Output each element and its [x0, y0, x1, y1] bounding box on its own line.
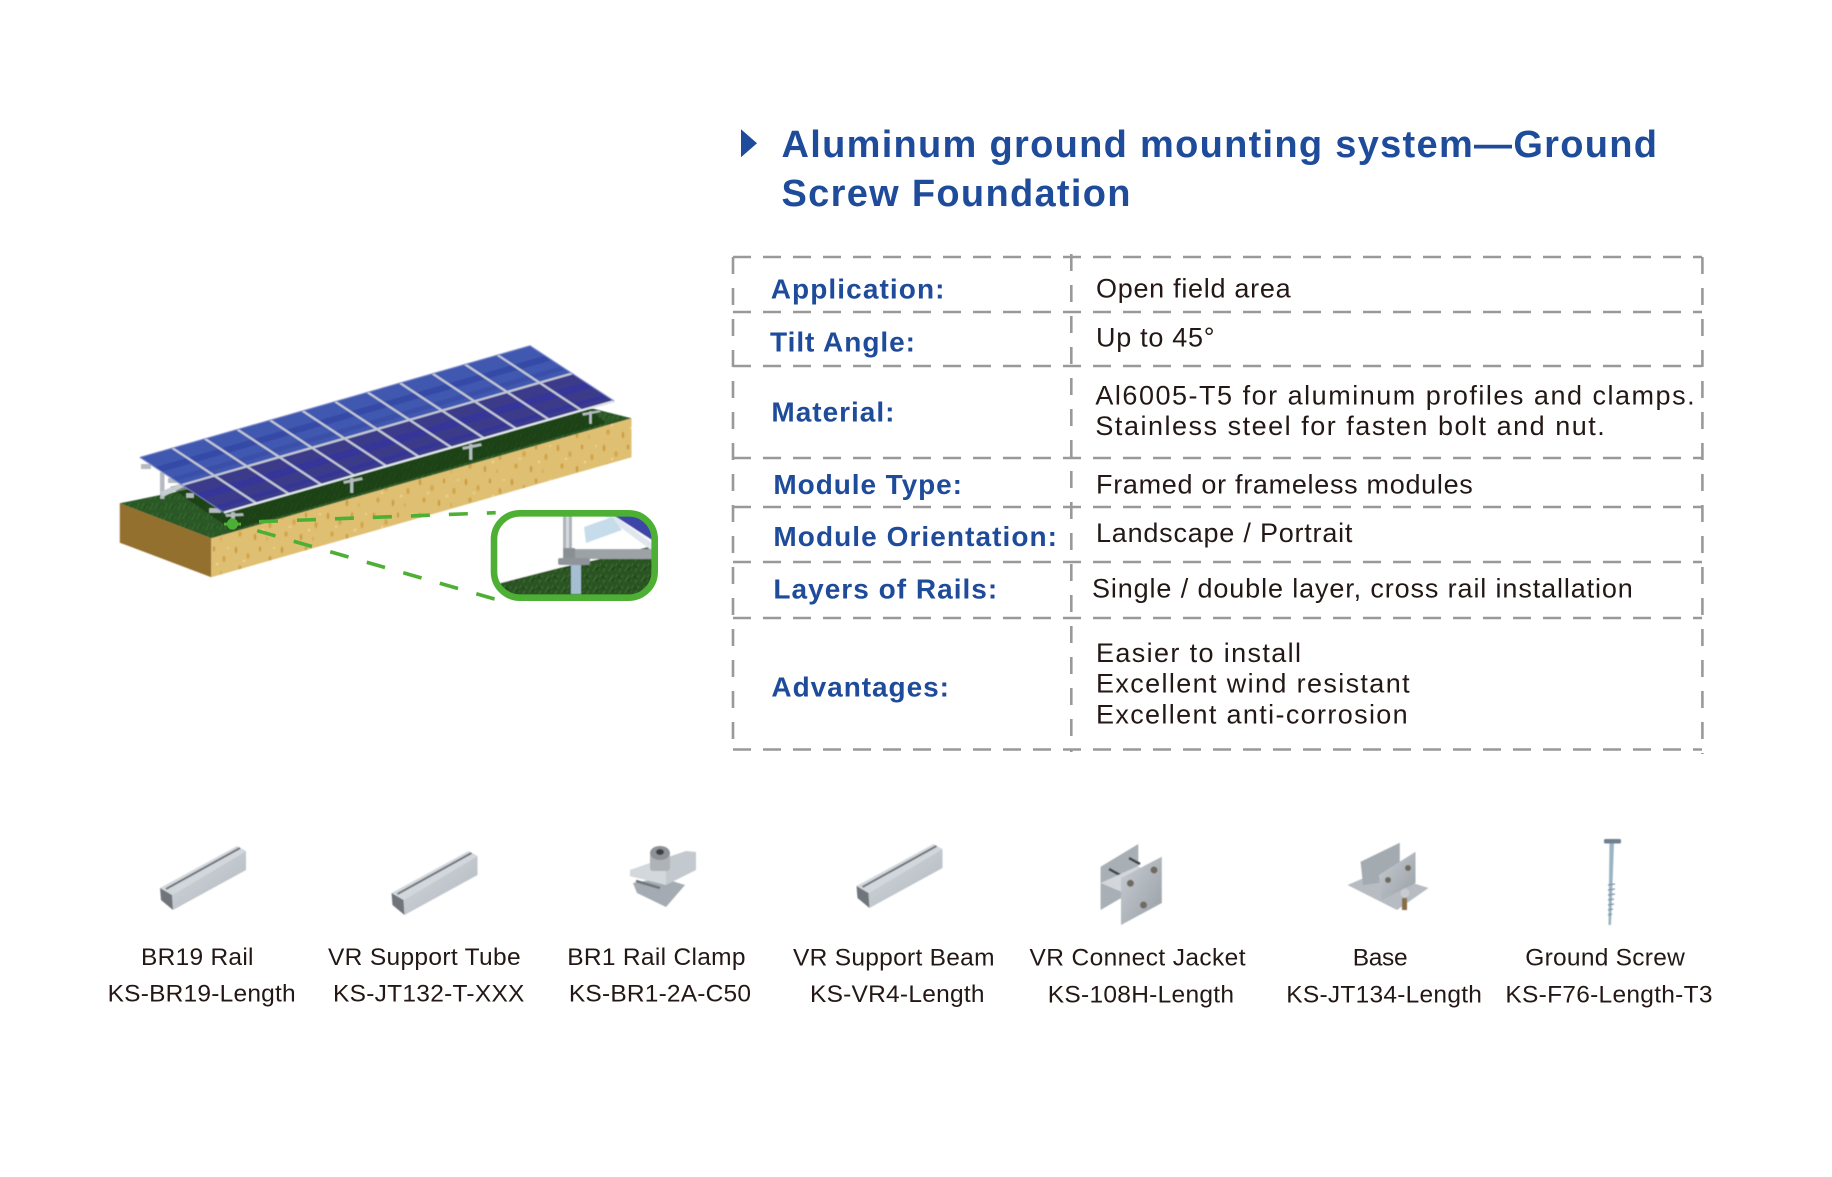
- label: [1505, 945, 1712, 1009]
- row: module orientation: Landscape / Portrait: [1096, 518, 1353, 548]
- component: VR Support Tube: [328, 851, 524, 1008]
- component: VR Support Beam: [793, 844, 994, 1008]
- inset contents: [500, 516, 652, 594]
- component: BR19 Rail: [108, 846, 296, 1008]
- row: tilt angle: [770, 322, 1214, 357]
- label: KS-JT132-T-XXX: [333, 981, 524, 1008]
- row: advantages: Excellent anti-corrosion: [1096, 699, 1408, 729]
- row: layers of rails: Layers of Rails:: [773, 573, 997, 604]
- row: layers of rails: [773, 573, 1633, 604]
- row: tilt angle: Up to 45°: [1096, 322, 1214, 352]
- label: VR Support Tube: [328, 944, 521, 971]
- row: layers of rails: Single / double layer, cross rail installation: [1092, 573, 1633, 603]
- row: application: Open field area: [1096, 274, 1292, 304]
- component: Base: [1286, 843, 1482, 1009]
- specifications table: [733, 254, 1702, 754]
- row: material: Material:: [771, 396, 894, 427]
- row: application: [771, 274, 1292, 305]
- icon: VR support beam: [856, 844, 942, 908]
- row: advantages: Advantages:: [771, 672, 949, 703]
- row: module orientation: Module Orientation:: [773, 521, 1057, 552]
- icon: base bracket: [1348, 843, 1428, 910]
- label: [793, 944, 994, 1008]
- row: advantages: [771, 638, 1410, 729]
- label: KS-JT134-Length: [1286, 982, 1482, 1009]
- dashed lines: [257, 513, 501, 601]
- label: [328, 944, 524, 1008]
- icon: ground screw: [1604, 839, 1621, 925]
- row: advantages: Excellent wind resistant: [1096, 669, 1410, 699]
- ground block: [120, 407, 632, 577]
- row: module type: [773, 469, 1473, 500]
- label: Ground Screw: [1525, 945, 1685, 972]
- label: BR1 Rail Clamp: [567, 944, 746, 971]
- row: module orientation: [773, 518, 1353, 552]
- title: [741, 124, 1657, 215]
- row: tilt angle: Tilt Angle:: [770, 326, 915, 357]
- title arrow: [741, 129, 757, 157]
- row: material: Al6005-T5 for aluminum profiles and clamps.: [1095, 381, 1695, 411]
- components row: [108, 839, 1713, 1009]
- label: KS-BR1-2A-C50: [569, 981, 751, 1008]
- row: application: Application:: [771, 274, 944, 305]
- label: [1286, 945, 1482, 1009]
- row: material: [771, 381, 1695, 441]
- inset frame: [494, 513, 655, 598]
- label: KS-108H-Length: [1048, 982, 1234, 1009]
- label: BR19 Rail: [141, 944, 254, 971]
- label: VR Connect Jacket: [1030, 945, 1246, 972]
- solar panels: [140, 346, 614, 513]
- title line 2: Screw Foundation: [782, 173, 1130, 215]
- callout: green marker and dashed zoom lines: [224, 513, 501, 601]
- illustration: solar array on ground block: [120, 346, 632, 577]
- icon: VR connect jacket: [1101, 844, 1162, 925]
- icon: VR support tube: [392, 851, 478, 915]
- label: VR Support Beam: [793, 944, 994, 971]
- label: [567, 944, 751, 1008]
- component: Ground Screw: [1505, 839, 1712, 1009]
- label: [108, 944, 296, 1008]
- icon: BR19 rail: [160, 846, 246, 910]
- label: KS-VR4-Length: [810, 981, 984, 1008]
- label: KS-F76-Length-T3: [1505, 982, 1712, 1009]
- title line 1: Aluminum ground mounting system—Ground: [782, 124, 1657, 166]
- row: advantages: Easier to install: [1096, 638, 1301, 668]
- mounting legs: [141, 410, 601, 521]
- icon: BR1 rail clamp: [630, 846, 696, 907]
- component: BR1 Rail Clamp: [567, 846, 751, 1008]
- table dashed grid: [733, 254, 1702, 754]
- component: VR Connect Jacket: [1030, 844, 1246, 1009]
- inset: close-up of ground screw: [494, 513, 655, 598]
- row: module type: Module Type:: [773, 469, 962, 500]
- label: KS-BR19-Length: [108, 981, 296, 1008]
- label: Base: [1353, 945, 1408, 972]
- marker dot: [224, 518, 241, 530]
- label: [1030, 945, 1246, 1009]
- row: module type: Framed or frameless modules: [1096, 469, 1473, 499]
- row: material: Stainless steel for fasten bolt and nut.: [1095, 411, 1605, 441]
